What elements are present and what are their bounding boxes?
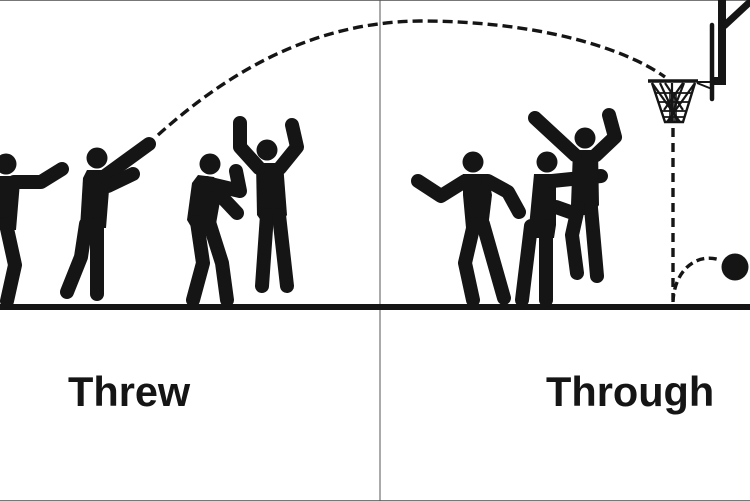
figure: left thrower's teammate xyxy=(0,154,62,301)
icon: basketball xyxy=(722,254,748,280)
ground line xyxy=(0,304,750,310)
dashed line: ball dropping through hoop xyxy=(671,128,675,300)
icon: hoop net xyxy=(652,83,695,122)
dashed arc: ball flight path xyxy=(158,21,665,135)
label: Threw: Threw xyxy=(68,368,191,415)
figure: crouching defender xyxy=(187,154,240,300)
label: Through: Through xyxy=(546,368,714,415)
dashed arc: ball bounce xyxy=(673,258,720,302)
figure: defender with raised arms xyxy=(240,123,297,286)
figure: standing player facing left xyxy=(418,152,519,300)
icon: basketball hoop and backboard xyxy=(648,0,750,122)
figure: player reaching under the jumper xyxy=(522,152,601,300)
figure: player throwing the ball xyxy=(67,144,149,294)
figure: jumping player xyxy=(535,115,615,276)
